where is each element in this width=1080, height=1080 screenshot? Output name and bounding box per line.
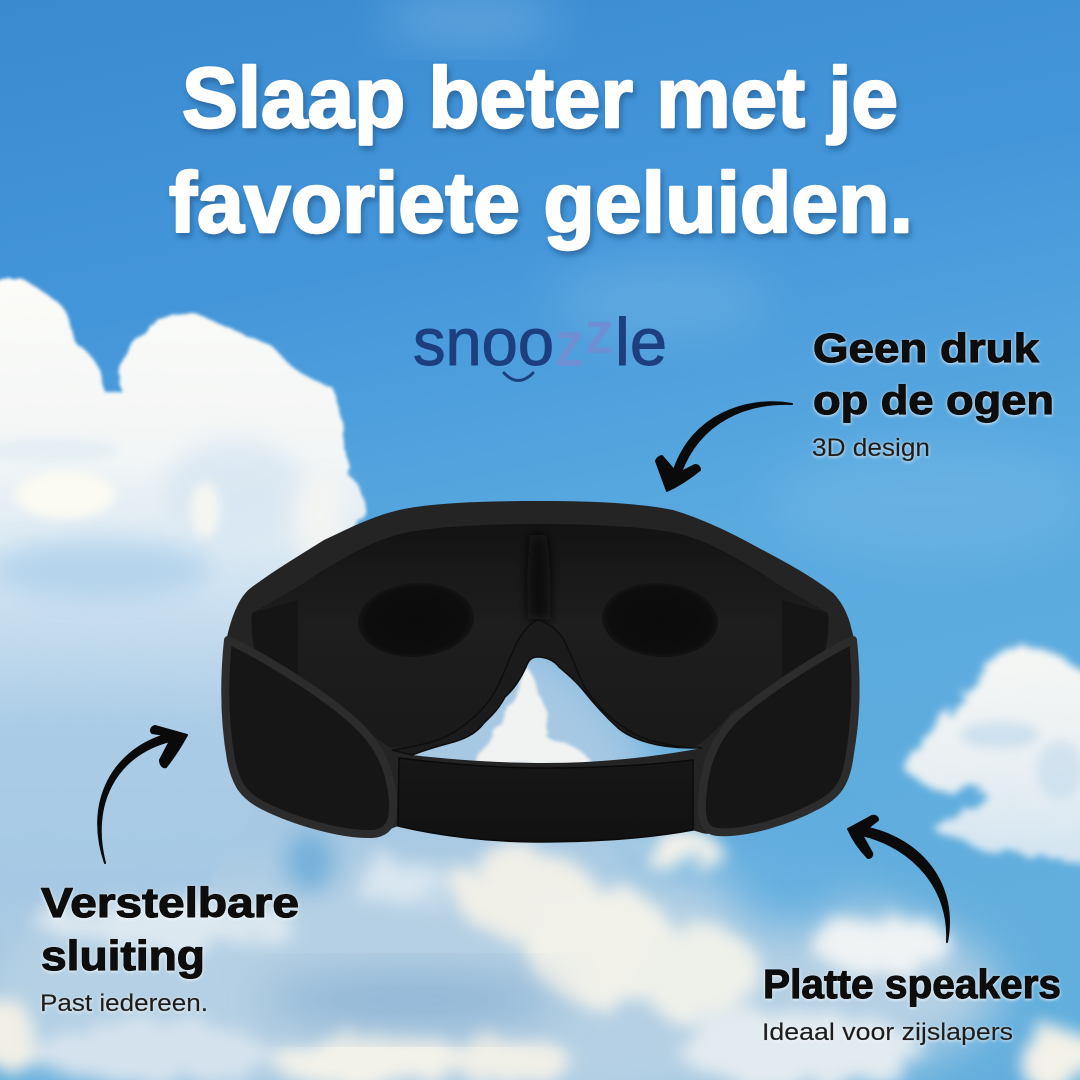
callout: geen druk: 3D design [812, 434, 930, 462]
left velvet wing [225, 640, 393, 834]
callout: verstelbare sluiting: Past iedereen. [40, 990, 208, 1017]
title: Slaap beter met je [182, 51, 898, 146]
callout: geen druk [812, 325, 1054, 462]
logo: snoozzle: le [615, 305, 667, 380]
callout: verstelbare sluiting [40, 879, 299, 1017]
title: favoriete geluiden. [169, 156, 913, 251]
title [169, 51, 913, 251]
arrow: bottom right pointing to mask [848, 816, 949, 942]
nose bridge groove [527, 535, 551, 622]
velcro strap [398, 758, 693, 842]
cloud seen through nose gap [470, 665, 590, 764]
right cloud [905, 645, 1080, 862]
mask outer band [222, 501, 859, 842]
logo: snoozzle: snoo [413, 305, 554, 380]
callout: platte speakers: Platte speakers [763, 961, 1061, 1007]
inner padded face [252, 524, 828, 748]
nose binding [392, 620, 702, 755]
callout: platte speakers [762, 961, 1061, 1046]
logo: snoozzle: z [556, 311, 583, 378]
callout: geen druk: Geen druk [813, 325, 1039, 371]
eye hollow left [356, 579, 476, 661]
callout: verstelbare sluiting: sluiting [41, 932, 205, 979]
logo: snoozzle [413, 301, 667, 380]
arrow: left pointing to strap [98, 726, 187, 863]
lower haze body [0, 570, 1000, 1080]
callout: platte speakers: Ideaal voor zijslapers [762, 1019, 1013, 1046]
callout: geen druk: op de ogen [813, 377, 1054, 423]
left cloud [0, 278, 365, 900]
side panels [252, 600, 828, 680]
arrow: top pointing to mask [656, 402, 792, 491]
sleep mask product [222, 501, 859, 842]
callout: verstelbare sluiting: Verstelbare [41, 879, 299, 926]
right velvet wing [702, 640, 855, 832]
eye hollow right [600, 579, 720, 661]
lower clouds [0, 828, 1080, 1080]
logo: snoozzle: z [586, 301, 613, 364]
